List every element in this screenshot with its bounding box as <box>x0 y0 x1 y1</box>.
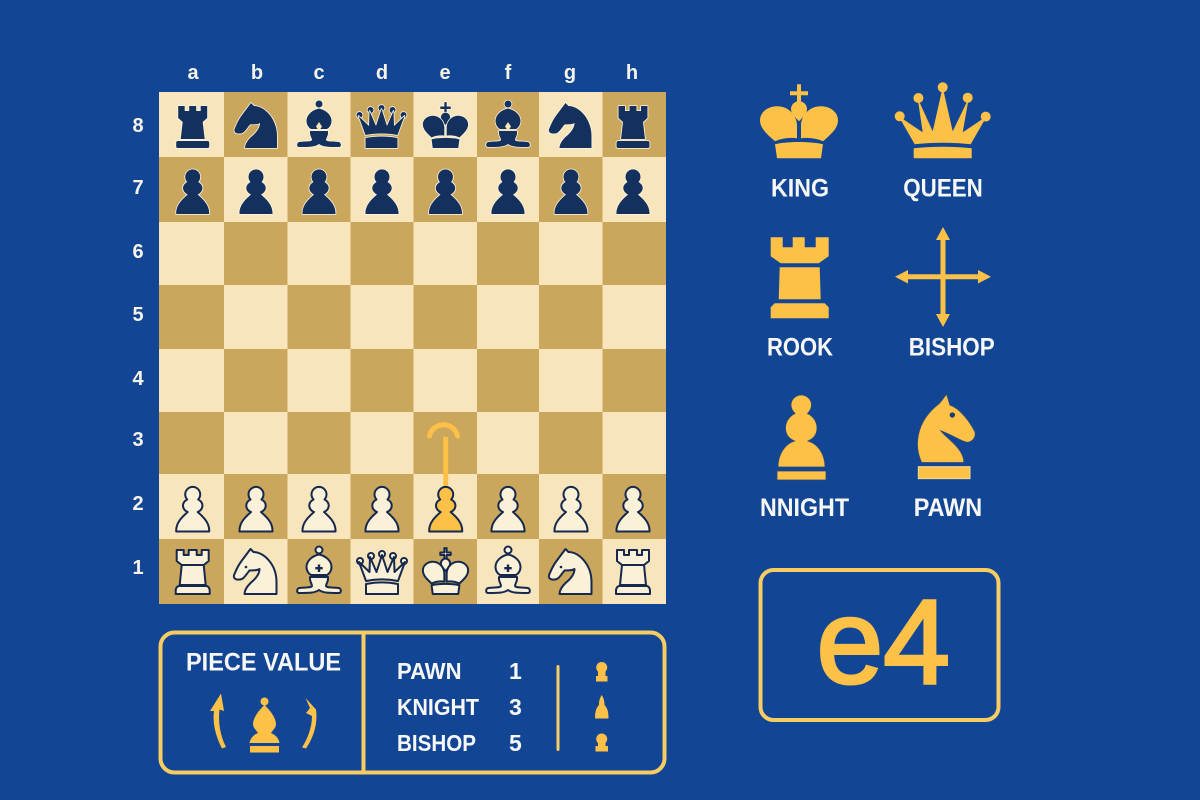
black pieces <box>176 100 650 214</box>
label: queen: QUEEN <box>903 175 983 203</box>
rank labels: 1 <box>132 557 144 579</box>
file labels: h <box>626 62 638 84</box>
value rows <box>397 658 522 756</box>
highlighted e2 pawn <box>429 487 462 532</box>
rank labels: 6 <box>132 241 144 263</box>
white pieces <box>176 487 650 594</box>
arrow: right curved <box>302 698 316 748</box>
rank labels: 8 <box>132 115 144 137</box>
panel: piece value: PIECE VALUE <box>186 649 341 677</box>
file labels: c <box>313 62 325 84</box>
value rows: KNIGHT <box>397 694 479 720</box>
file labels: g <box>564 62 576 84</box>
mini icons <box>595 662 608 752</box>
arrow: e2 to e4 move <box>430 425 458 488</box>
rank labels: 3 <box>132 429 144 451</box>
callout: e4 notation: e4 <box>816 575 950 709</box>
icon: four-way arrows <box>895 227 991 327</box>
icon: bishop <box>250 698 280 752</box>
file labels: b <box>251 62 263 84</box>
arrow: left curved <box>210 694 226 748</box>
separator line <box>556 665 560 751</box>
rank labels <box>132 115 144 579</box>
rank labels: 7 <box>132 177 144 199</box>
value rows: PAWN <box>397 658 462 684</box>
file labels <box>187 62 638 84</box>
file labels: a <box>187 62 199 84</box>
value rows: 1 <box>509 658 522 684</box>
icon: pawn <box>777 395 826 480</box>
icon: rook <box>771 237 829 318</box>
file labels: d <box>376 62 388 84</box>
label: king: KING <box>771 175 829 203</box>
rank labels: 2 <box>132 493 144 515</box>
value rows: 5 <box>509 730 522 756</box>
value rows: 3 <box>509 694 522 720</box>
callout: e4 notation <box>760 570 998 720</box>
label: rook: ROOK <box>767 334 833 362</box>
file labels: f <box>505 62 512 84</box>
label: nnight: NNIGHT <box>760 494 849 522</box>
rank labels: 4 <box>132 368 144 390</box>
file labels: e <box>439 62 451 84</box>
rank labels: 5 <box>132 304 144 326</box>
label: pawn: PAWN <box>914 494 982 522</box>
panel: piece value <box>160 632 664 772</box>
chess board <box>159 92 666 604</box>
label: bishop: BISHOP <box>909 334 995 362</box>
value rows: BISHOP <box>397 730 476 756</box>
icon: knight <box>917 394 975 479</box>
icon: queen <box>895 82 991 158</box>
icon: king <box>760 84 838 158</box>
